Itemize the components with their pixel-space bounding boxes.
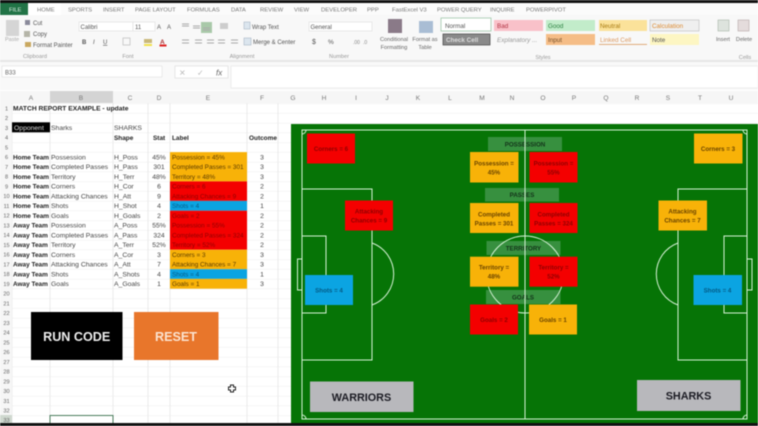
table: stat values: 3 (157, 252, 161, 259)
row headers: 18 (3, 272, 10, 278)
row headers: 14 (3, 233, 10, 239)
cell styles gallery: Note (652, 37, 666, 44)
table: team and stat names: Possession (51, 154, 86, 161)
table: outcome values: 1 (260, 203, 264, 210)
number group: .00 (353, 40, 360, 46)
ribbon tab labels: DEVELOPER (321, 8, 357, 14)
table: outcome values: 2 (260, 223, 264, 230)
table: team and stat names: Territory (51, 174, 76, 181)
tab: HOME (28, 3, 61, 15)
cells group: Delete (736, 37, 752, 43)
row headers: 11 (4, 204, 9, 210)
table column headings: Label (172, 135, 189, 142)
worksheet grid (0, 91, 758, 423)
table: stat values: 4 (157, 203, 161, 210)
table column headings: Shape (114, 135, 134, 142)
conditional formatting and format as table: Format as (412, 37, 438, 43)
table: team and stat names: Away Team (13, 242, 48, 249)
table: team and stat names: Home Team (13, 164, 49, 171)
box: away shots (694, 275, 742, 305)
table: team and stat names: Away Team (13, 232, 48, 239)
table: coloured label column: Corners = 3 (172, 252, 206, 259)
opponent row (12, 122, 142, 132)
row headers (0, 106, 12, 424)
font group: Font (122, 54, 134, 60)
table: team and stat names: Completed Passes (51, 232, 109, 239)
box: away shots: Shots = 4 (704, 288, 732, 294)
row headers: 12 (3, 214, 10, 220)
clipboard group: Clipboard (23, 54, 47, 60)
table: outcome values: 3 (260, 252, 264, 259)
table: shape names: H_Poss (114, 154, 138, 161)
table: shape names: H_Terr (114, 174, 135, 181)
opponent row: Sharks (51, 125, 73, 132)
table: stat values: 2 (157, 213, 161, 220)
button: run code: RUN CODE (43, 330, 110, 344)
number group: .0 (363, 40, 367, 46)
alignment group: Alignment (230, 54, 255, 60)
table: stat values (152, 154, 166, 288)
table: team and stat names: Corners (51, 252, 76, 259)
row headers: 31 (3, 399, 10, 405)
cells group (716, 20, 752, 61)
table: stat values: 6 (157, 184, 161, 191)
box: home possession: 45% (488, 170, 501, 176)
table: shape names: A_Cor (114, 252, 134, 259)
table: shape names: H_Cor (114, 184, 134, 191)
row headers: 29 (3, 379, 10, 385)
table: stat values: 9 (157, 193, 161, 200)
table: team and stat names (13, 154, 109, 288)
table: team and stat names: Shots (51, 203, 69, 210)
row headers: 7 (5, 165, 8, 171)
table: outcome values: 2 (260, 232, 264, 239)
box: home passes (470, 203, 518, 233)
table: stat values: 301 (153, 164, 165, 171)
table: shape names: A_Poss (114, 223, 138, 230)
table: team and stat names: Goals (51, 281, 69, 288)
column headers: L (448, 95, 452, 102)
row headers: 4 (5, 136, 8, 142)
font group: A (157, 25, 161, 31)
ribbon tab labels: SPORTS (68, 8, 92, 14)
font group: A (167, 25, 171, 31)
team name: sharks: SHARKS (666, 390, 711, 402)
ribbon tab labels: PPP (367, 8, 379, 14)
table: shape names: H_Goals (114, 213, 141, 220)
table: coloured label column: Territory = 52% (172, 242, 215, 249)
box: away passes (530, 203, 578, 233)
column headers: I (355, 95, 357, 102)
table: stat values: 1 (157, 281, 161, 288)
tab: HOME: HOME (37, 8, 55, 14)
conditional formatting and format as table: Conditional (380, 37, 408, 43)
table: team and stat names: Away Team (13, 252, 48, 259)
cell styles gallery: Good (548, 23, 564, 30)
row headers: 30 (3, 389, 10, 395)
table: shape names: A_Pass (114, 232, 138, 239)
table: team and stat names: Goals (51, 213, 69, 220)
row headers: 27 (3, 360, 10, 366)
pitch markings (298, 130, 752, 419)
number group (309, 22, 372, 60)
column headers: S (666, 95, 671, 102)
table: stat values: 7 (157, 262, 161, 269)
cell styles gallery: Neutral (600, 23, 620, 30)
column headers: O (540, 95, 546, 102)
cell styles gallery: Bad (497, 23, 509, 30)
column headers: C (128, 95, 133, 102)
box: home corners (307, 134, 355, 164)
box: away territory: 52% (547, 274, 560, 280)
table: stat values: 4 (157, 271, 161, 278)
box: home territory: Territory = (479, 264, 510, 272)
table: coloured label column: Goals = 2 (172, 213, 200, 220)
table: coloured label column: Attacking Chances = 9 (172, 193, 237, 200)
ribbon tab labels: DATA (231, 8, 246, 14)
team name: sharks (637, 380, 740, 411)
tab: FILE: FILE (9, 8, 22, 14)
row headers: 33 (3, 418, 10, 424)
ribbon tab labels: FORMULAS (187, 8, 220, 14)
table column headings (114, 135, 277, 142)
box: away possession: 55% (547, 170, 560, 176)
row headers: 22 (3, 311, 10, 317)
column headers: H (322, 95, 327, 102)
table: outcome values: 2 (260, 242, 264, 249)
formula bar (0, 62, 758, 90)
table: coloured label column: Territory = 48% (172, 174, 215, 181)
ribbon tab labels: INQUIRE (490, 8, 515, 14)
banner: territory: TERRITORY (506, 245, 542, 252)
ribbon tab labels: FastExcel V3 (392, 8, 427, 14)
football pitch (291, 124, 758, 423)
table column headings: Stat (153, 135, 166, 142)
table: team and stat names: Away Team (13, 271, 48, 278)
box: home possession: Possession = (474, 160, 514, 168)
box: away goals: Goals = 1 (539, 317, 567, 324)
ribbon: Excel toolbar (0, 0, 758, 62)
selected cell B33 (50, 416, 113, 424)
bottom window edge (0, 423, 758, 426)
column headers (29, 91, 734, 103)
cell styles gallery: Check Cell (446, 37, 478, 44)
table: shape names: H_Att (114, 193, 131, 200)
button: reset (134, 312, 218, 360)
number group: Number (329, 54, 349, 60)
banner: goals (486, 290, 560, 304)
box: away possession (530, 152, 578, 182)
table: shape names: H_Shot (114, 203, 137, 210)
row headers: 9 (5, 184, 8, 190)
table: outcome values: 3 (260, 262, 264, 269)
column headers: A (29, 95, 34, 102)
row headers: 19 (3, 282, 10, 288)
table: team and stat names: Territory (51, 242, 76, 249)
table: team and stat names: Home Team (13, 193, 49, 200)
banner: passes: PASSES (510, 192, 534, 199)
button: reset: RESET (155, 330, 197, 344)
ribbon tab labels: REVIEW (260, 8, 284, 14)
table: coloured label column: Attacking Chances = 7 (172, 262, 237, 269)
column headers: F (260, 95, 264, 102)
font group: Calibri (80, 25, 98, 31)
table: coloured label column: Possession = 55% (172, 223, 225, 230)
box: home passes: Completed (478, 212, 510, 218)
table: coloured label column: Shots = 4 (172, 203, 200, 210)
column headers: D (157, 95, 162, 102)
table: outcome values (260, 154, 264, 288)
column headers: E (206, 95, 211, 102)
box: away corners (694, 134, 742, 164)
cell styles gallery (441, 18, 699, 61)
row headers: 25 (3, 340, 10, 346)
box: away territory (530, 257, 578, 287)
box: home attacking chances: Chances = 9 (351, 218, 388, 224)
number group: % (328, 39, 334, 46)
opponent row: Opponent (14, 125, 44, 132)
cells group: Insert (716, 37, 730, 43)
clipboard group: Paste (5, 37, 19, 43)
formula bar: ✕ (179, 68, 186, 78)
button: run code (31, 312, 122, 360)
opponent row: SHARKS (114, 125, 142, 132)
column headers: R (635, 95, 640, 102)
table: team and stat names: Shots (51, 271, 69, 278)
table: team and stat names: Completed Passes (51, 164, 109, 171)
row headers: 10 (3, 194, 10, 200)
box: home territory (470, 257, 518, 287)
clipboard group (5, 20, 73, 60)
table: team and stat names: Attacking Chances (51, 262, 108, 269)
icon: mouse cursor (228, 385, 236, 392)
table: team and stat names: Away Team (13, 262, 48, 269)
number group: General (310, 25, 332, 31)
table: stat values: 48% (152, 174, 166, 181)
table: team and stat names: Home Team (13, 174, 49, 181)
row headers: 23 (3, 321, 10, 327)
column headers: U (729, 95, 734, 102)
row headers: 13 (3, 223, 10, 229)
clipboard group: Copy (33, 32, 47, 38)
ribbon tab labels: POWERPIVOT (526, 8, 566, 14)
table: outcome values: 3 (260, 174, 264, 181)
row headers: 2 (5, 116, 8, 122)
banner: goals: GOALS (512, 294, 534, 301)
box: away attacking chances (658, 200, 707, 230)
box: away passes: Passes = 324 (534, 220, 573, 228)
column headers: P (572, 95, 577, 102)
table: outcome values: 2 (260, 213, 264, 220)
row headers: 21 (3, 301, 10, 307)
ribbon tab labels: POWER QUERY (437, 8, 482, 14)
row headers: 6 (5, 155, 8, 161)
alignment group: Wrap Text (252, 25, 279, 31)
table: team and stat names: Corners (51, 184, 76, 191)
table: shape names: A_Terr (114, 242, 135, 249)
column headers: M (479, 95, 485, 102)
row headers: 26 (3, 350, 10, 356)
ribbon tab labels: INSERT (103, 8, 125, 14)
table: team and stat names: Home Team (13, 203, 49, 210)
conditional formatting and format as table (380, 19, 438, 51)
box: home attacking chances: Attacking (355, 208, 383, 216)
clipboard group: Format Painter (33, 43, 73, 49)
formula bar: ✓ (197, 68, 204, 78)
cell styles gallery: Styles (535, 55, 551, 61)
column headers: Q (603, 95, 609, 102)
clipboard group: Cut (33, 21, 43, 27)
table: coloured label column: Possession = 45% (172, 154, 225, 161)
table: shape names: A_Goals (114, 281, 141, 288)
cell styles gallery: Explanatory ... (497, 37, 537, 44)
row headers: 17 (3, 262, 10, 268)
table: coloured label column: Completed Passes = 324 (172, 232, 244, 239)
cell styles gallery: Normal (445, 23, 465, 30)
row headers: 3 (5, 126, 8, 132)
box: away passes: Completed (538, 212, 570, 218)
ribbon tab labels (68, 8, 566, 14)
banner: possession: POSSESSION (505, 141, 546, 148)
box: home possession (470, 152, 518, 182)
table: team and stat names: Away Team (13, 223, 48, 230)
box: home goals: Goals = 2 (480, 317, 508, 324)
cells group: Cells (739, 55, 751, 61)
font group: B (82, 40, 87, 46)
table: stat values: 324 (153, 232, 165, 239)
table: coloured label column: Shots = 4 (172, 271, 200, 278)
table: shape names: A_Att (114, 262, 131, 269)
table: outcome values: 3 (260, 281, 264, 288)
formula bar: B33 (5, 70, 16, 76)
table: coloured label column: Goals = 1 (172, 281, 200, 288)
table: stat values: 55% (152, 223, 166, 230)
table: outcome values: 2 (260, 184, 264, 191)
box: home territory: 48% (488, 274, 501, 280)
font group: U (103, 40, 107, 46)
table: stat values: 52% (152, 242, 166, 249)
table: shape names: A_Shots (114, 271, 140, 278)
team name: warriors: WARRIORS (332, 392, 391, 404)
table: outcome values: 1 (260, 271, 264, 278)
box: home passes: Passes = 301 (475, 220, 514, 228)
table: shape names: H_Pass (114, 164, 138, 171)
row headers: 15 (3, 243, 10, 249)
font group (79, 22, 171, 60)
conditional formatting and format as table: Formatting (381, 45, 407, 51)
font group: 11 (135, 25, 142, 31)
column headers: K (416, 95, 421, 102)
banner: passes (485, 188, 559, 202)
table column headings: Outcome (249, 135, 277, 142)
row headers: 24 (3, 330, 10, 336)
alignment group: Merge & Center (253, 40, 295, 46)
row headers: 8 (5, 174, 8, 180)
box: away possession: Possession = (534, 160, 574, 168)
table: coloured label column: Corners = 6 (172, 184, 206, 191)
box: away attacking chances: Attacking (668, 208, 697, 216)
row headers: 28 (3, 370, 10, 376)
table: outcome values: 2 (260, 193, 264, 200)
cell styles gallery: Calculation (652, 23, 684, 30)
table: outcome values: 3 (260, 154, 264, 161)
column headers: J (385, 95, 389, 102)
box: home goals (470, 304, 518, 334)
table: team and stat names: Home Team (13, 154, 49, 161)
table: team and stat names: Attacking Chances (51, 193, 108, 200)
table: team and stat names: Away Team (13, 281, 48, 288)
table: team and stat names: Home Team (13, 213, 49, 220)
box: home corners: Corners = 6 (314, 146, 349, 153)
table: team and stat names: Home Team (13, 184, 49, 191)
formula bar: fx (216, 68, 223, 78)
box: home shots (305, 275, 353, 305)
box: home attacking chances (345, 200, 393, 230)
font group: A (160, 39, 165, 46)
banner: territory (486, 241, 560, 255)
banner: possession (488, 137, 562, 151)
row headers: 16 (3, 252, 10, 258)
number group: $ (312, 39, 316, 46)
ribbon tab labels: PAGE LAYOUT (135, 8, 176, 14)
column headers: N (510, 95, 515, 102)
conditional formatting and format as table: Table (418, 45, 432, 51)
team name: warriors (310, 382, 414, 412)
box: home shots: Shots = 4 (315, 288, 343, 294)
box: away goals (529, 304, 577, 334)
table: shape names (114, 154, 141, 288)
table: stat values: 45% (152, 154, 166, 161)
row headers: 32 (3, 408, 10, 414)
column headers: B (79, 95, 84, 102)
table: coloured label column (170, 152, 247, 289)
row headers: 20 (3, 292, 10, 298)
box: away attacking chances: Chances = 7 (664, 218, 701, 224)
ribbon tab labels: VIEW (294, 8, 309, 14)
tab: FILE (0, 3, 28, 15)
box: away territory: Territory = (538, 264, 569, 272)
title: MATCH REPORT EXAMPLE - update (13, 106, 129, 113)
alignment group (182, 22, 295, 60)
row headers: 1 (5, 106, 8, 112)
box: away corners: Corners = 3 (701, 146, 736, 153)
cell styles gallery: Input (548, 37, 562, 44)
table: team and stat names: Possession (51, 223, 86, 230)
row headers: 5 (5, 145, 8, 151)
column headers: G (290, 95, 296, 102)
table: coloured label column: Completed Passes = 301 (172, 164, 244, 171)
font group: I (93, 40, 95, 46)
cell styles gallery: Linked Cell (600, 37, 631, 44)
column headers: T (698, 95, 702, 102)
table: outcome values: 3 (260, 164, 264, 171)
